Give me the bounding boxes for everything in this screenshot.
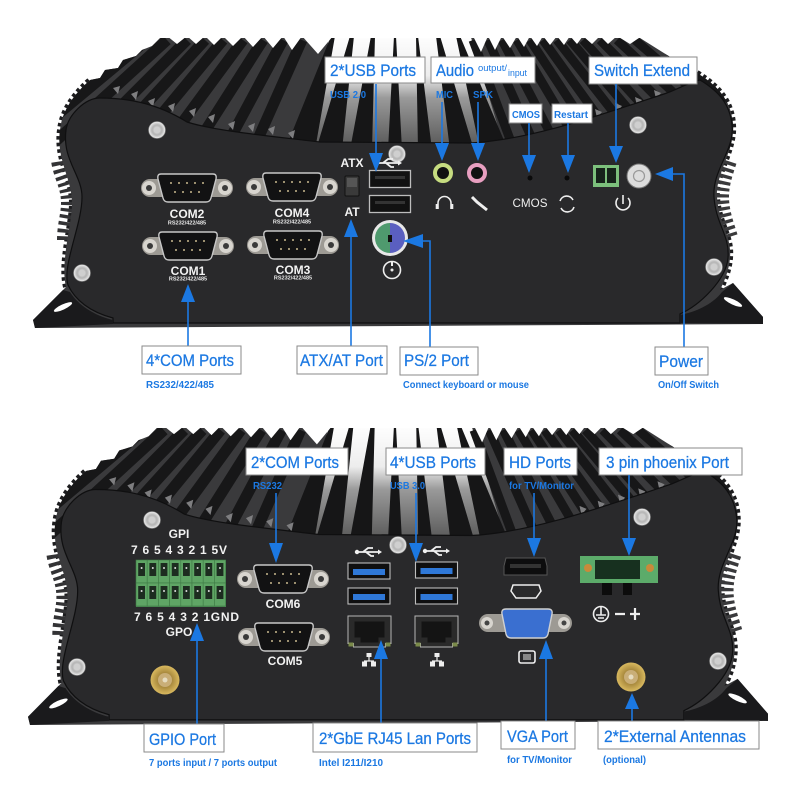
COM2 connector (141, 174, 233, 226)
label: Audio: Audio (436, 62, 474, 80)
COM5 connector (238, 623, 330, 668)
arrow: Switch Extend (609, 84, 623, 163)
label: 2*External Antennas: 2*External Antennas (604, 728, 746, 746)
label: ATX/AT Port (297, 346, 387, 374)
note: RS232: RS232 (253, 481, 282, 492)
device: front panel chassis (0, 424, 800, 725)
COM3 connector: RS232/422/485 (274, 276, 312, 282)
GPIO terminal and pin labels: 7 6 5 4 3 2 1 5V (131, 543, 227, 557)
USB 3.0 and LAN stack right (415, 547, 458, 666)
arrow: GPIO (190, 623, 204, 724)
arrow: CMOS (522, 123, 536, 173)
label: 2*GbE RJ45 Lan Ports (313, 723, 477, 752)
label: Audio: output/ (478, 63, 508, 73)
label: 2*COM Ports: 2*COM Ports (251, 454, 339, 472)
arrow: LAN (374, 640, 388, 723)
arrow: MIC (435, 102, 449, 161)
label: ATX/AT Port: ATX/AT Port (300, 352, 383, 370)
note: On/Off Switch: On/Off Switch (658, 380, 719, 391)
COM4 connector: COM4 (275, 206, 310, 220)
arrow: PS/2 (403, 234, 430, 347)
arrow: USB (369, 84, 383, 172)
GPIO terminal and pin labels (131, 527, 239, 639)
label: 2*COM Ports (246, 448, 348, 475)
icon: VGA (519, 651, 535, 663)
arrow: USB 3.0 (409, 493, 423, 562)
label: HD Ports (504, 448, 577, 475)
note: RS232/422/485: RS232/422/485 (146, 380, 214, 391)
label: GPIO Port (144, 724, 224, 752)
label: 2*External Antennas (598, 721, 759, 749)
GPIO terminal and pin labels: GPO (166, 625, 192, 639)
COM1 connector (142, 232, 234, 282)
note: MIC: MIC (436, 90, 453, 101)
arrow: Restart (561, 123, 575, 173)
phoenix connector (580, 556, 658, 595)
note: keyboard or mouse: Connect keyboard or mouse (403, 380, 529, 391)
screws: top device (74, 116, 722, 282)
label: 3 pin phoenix Port (599, 448, 742, 475)
arrow: Power (655, 167, 684, 347)
PS/2 port (372, 220, 408, 278)
note: for TV/Monitor bottom: for TV/Monitor (507, 755, 572, 766)
label: VGA Port: VGA Port (507, 728, 568, 746)
arrow: ATX/AT (344, 219, 358, 346)
icon: microphone (472, 197, 487, 210)
icon: power (616, 195, 630, 210)
label: Switch Extend (589, 57, 697, 84)
note: Intel: Intel I211/I210 (319, 758, 383, 769)
HDMI port (504, 558, 547, 575)
icon: refresh (560, 196, 574, 212)
label: Power (655, 347, 708, 375)
antenna connector left (150, 666, 180, 694)
COM1 connector: COM1 (171, 264, 206, 278)
CMOS and restart holes (512, 176, 570, 210)
arrow: phoenix (622, 475, 636, 556)
green switch terminal (593, 165, 619, 187)
note: USB 2.0: USB 2.0 (330, 90, 366, 101)
power button (627, 164, 651, 188)
label: 4*COM Ports (142, 346, 241, 374)
label: VGA Port (501, 721, 575, 749)
COM1 connector: RS232/422/485 (169, 276, 207, 282)
COM2 connector: RS232/422/485 (168, 220, 206, 226)
label: 4*COM Ports: 4*COM Ports (146, 352, 234, 370)
antenna connector right (616, 662, 646, 692)
label: 4*USB Ports: 4*USB Ports (390, 454, 476, 472)
arrow: COM ports (181, 284, 195, 346)
USB 3.0 and LAN stack left (348, 548, 391, 666)
label: 4*USB Ports (386, 448, 485, 475)
label: GPIO Port: GPIO Port (149, 731, 216, 749)
COM3 connector (247, 231, 339, 282)
USB 2.0 ports (370, 159, 410, 212)
label: 2*GbE RJ45 Lan Ports: 2*GbE RJ45 Lan Ports (319, 730, 471, 748)
COM5 connector: COM5 (268, 654, 303, 668)
label: 2*USB Ports: 2*USB Ports (330, 62, 416, 80)
arrow: SPK (471, 102, 485, 161)
GPIO terminal and pin labels: 7 6 5 4 3 2 1GND (134, 610, 239, 624)
label: 2*USB Ports (325, 57, 425, 83)
icon: HDMI (511, 585, 541, 598)
icon: headphones (436, 196, 452, 209)
label: Switch Extend: Switch Extend (594, 62, 690, 80)
COM4 connector: RS232/422/485 (273, 220, 311, 226)
COM4 connector (246, 173, 338, 226)
GPIO terminal and pin labels: GPI (169, 527, 189, 541)
arrow: HD (527, 493, 541, 557)
label: Restart: Restart (554, 110, 589, 121)
note: USB 3.0: USB 3.0 (390, 481, 425, 492)
label: CMOS: CMOS (512, 110, 540, 121)
COM6 connector: COM6 (266, 597, 301, 611)
note: GPIO ports: 7 ports input / 7 ports output (149, 758, 278, 769)
label: PS/2 Port (400, 347, 478, 375)
icon: earth minus plus (594, 606, 640, 622)
arrow: antenna (625, 693, 639, 721)
note: optional: (optional) (603, 755, 646, 766)
CMOS and restart holes: CMOS (512, 198, 548, 210)
label: 3 pin phoenix Port: 3 pin phoenix Port (606, 454, 729, 472)
ATX/AT switch: ATX (340, 156, 364, 170)
arrow: VGA (539, 640, 553, 721)
label: PS/2 Port: PS/2 Port (404, 352, 469, 370)
COM6 connector (237, 565, 329, 611)
note: for TV/Monitor top: for TV/Monitor (509, 481, 574, 492)
label: Restart (552, 104, 592, 123)
ATX/AT switch: AT (344, 205, 360, 219)
screws: bottom device (68, 508, 726, 676)
VGA port (479, 609, 572, 638)
COM2 connector: COM2 (170, 207, 205, 221)
note: SPK: SPK (473, 90, 494, 101)
label: HD Ports: HD Ports (509, 454, 571, 472)
label: CMOS (509, 104, 542, 123)
device: rear panel chassis (0, 34, 800, 328)
arrow: COM6 (269, 493, 283, 563)
ATX/AT switch (340, 156, 364, 219)
label: Power: Power (659, 353, 703, 371)
label: Audio: input (508, 68, 527, 78)
audio jacks (435, 165, 485, 181)
COM3 connector: COM3 (276, 263, 311, 277)
label: Audio (431, 57, 535, 83)
